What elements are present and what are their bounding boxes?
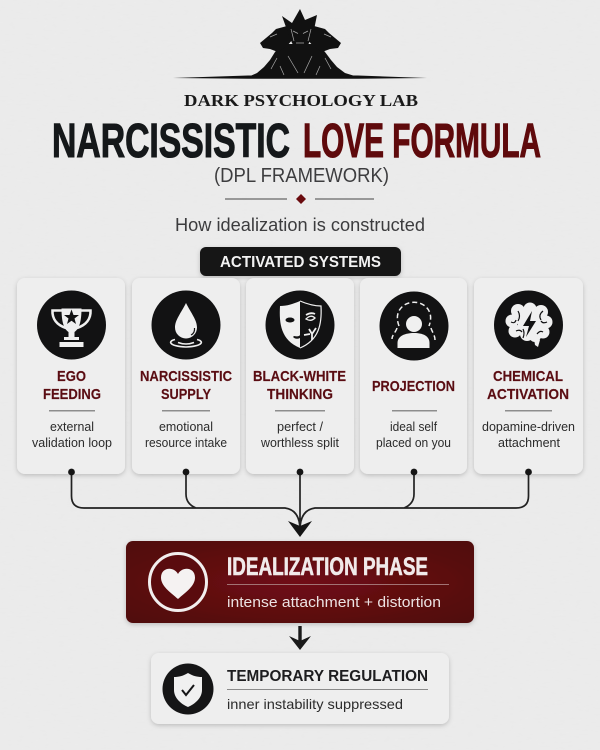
panel: idealization phase: IDEALIZATION PHASE xyxy=(227,553,428,581)
panel: idealization phase xyxy=(126,541,474,623)
brand name: DARK PSYCHOLOGY LAB xyxy=(184,91,418,110)
panel: projection: PROJECTION xyxy=(372,378,455,395)
panel: idealization phase: intense attachment + distortion xyxy=(227,595,441,611)
icon: person with dashed outline xyxy=(392,302,435,348)
icon: heart in ring xyxy=(150,554,206,610)
icon: brain with lightning bolt xyxy=(506,302,552,347)
panel: projection xyxy=(360,278,467,474)
panel: chemical activation xyxy=(474,278,583,474)
connector: systems converge arrow xyxy=(68,469,532,537)
panel: black-white thinking: BLACK-WHITE xyxy=(253,368,346,385)
icon: water drop xyxy=(171,303,201,347)
panel: temporary regulation: TEMPORARY REGULATION xyxy=(227,668,428,685)
panel: temporary regulation: inner instability suppressed xyxy=(227,696,403,712)
panel: narcissistic supply: SUPPLY xyxy=(161,386,211,403)
panel: ego feeding: external xyxy=(50,419,94,434)
section label: activated systems: ACTIVATED SYSTEMS xyxy=(220,254,381,271)
panel: black-white thinking xyxy=(246,278,354,474)
diamond ornament xyxy=(296,194,306,204)
panel: chemical activation: ACTIVATION xyxy=(487,386,569,403)
panel: temporary regulation xyxy=(151,653,449,724)
panel: projection: ideal self xyxy=(390,419,437,434)
panel: black-white thinking: perfect / xyxy=(277,419,323,434)
icon: split mask xyxy=(280,301,321,348)
icon: trophy xyxy=(52,308,91,347)
section label: activated systems xyxy=(200,247,401,276)
panel: black-white thinking: worthless split xyxy=(260,435,339,450)
panel: ego feeding: FEEDING xyxy=(43,386,101,403)
title: NARCISSISTIC xyxy=(52,115,290,168)
title xyxy=(52,115,541,168)
panel: chemical activation: attachment xyxy=(498,435,560,450)
panel: ego feeding xyxy=(17,278,125,474)
panel: narcissistic supply: emotional xyxy=(159,419,213,434)
arrow: down to regulation xyxy=(289,626,311,650)
panel: chemical activation: CHEMICAL xyxy=(493,368,563,385)
subtitle: (DPL FRAMEWORK) xyxy=(214,165,389,187)
logo: three-headed wolf xyxy=(173,9,427,79)
panel: narcissistic supply xyxy=(132,278,240,474)
panel: narcissistic supply: resource intake xyxy=(145,435,227,450)
panel: ego feeding: validation loop xyxy=(32,435,112,450)
panel: narcissistic supply: NARCISSISTIC xyxy=(140,368,232,385)
panel: black-white thinking: THINKING xyxy=(267,386,333,403)
panel: chemical activation: dopamine-driven xyxy=(482,419,575,434)
tagline: How idealization is constructed xyxy=(175,214,425,235)
icon: shield with check xyxy=(174,673,202,707)
panel: ego feeding: EGO xyxy=(57,368,86,385)
panel: projection: placed on you xyxy=(376,435,451,450)
